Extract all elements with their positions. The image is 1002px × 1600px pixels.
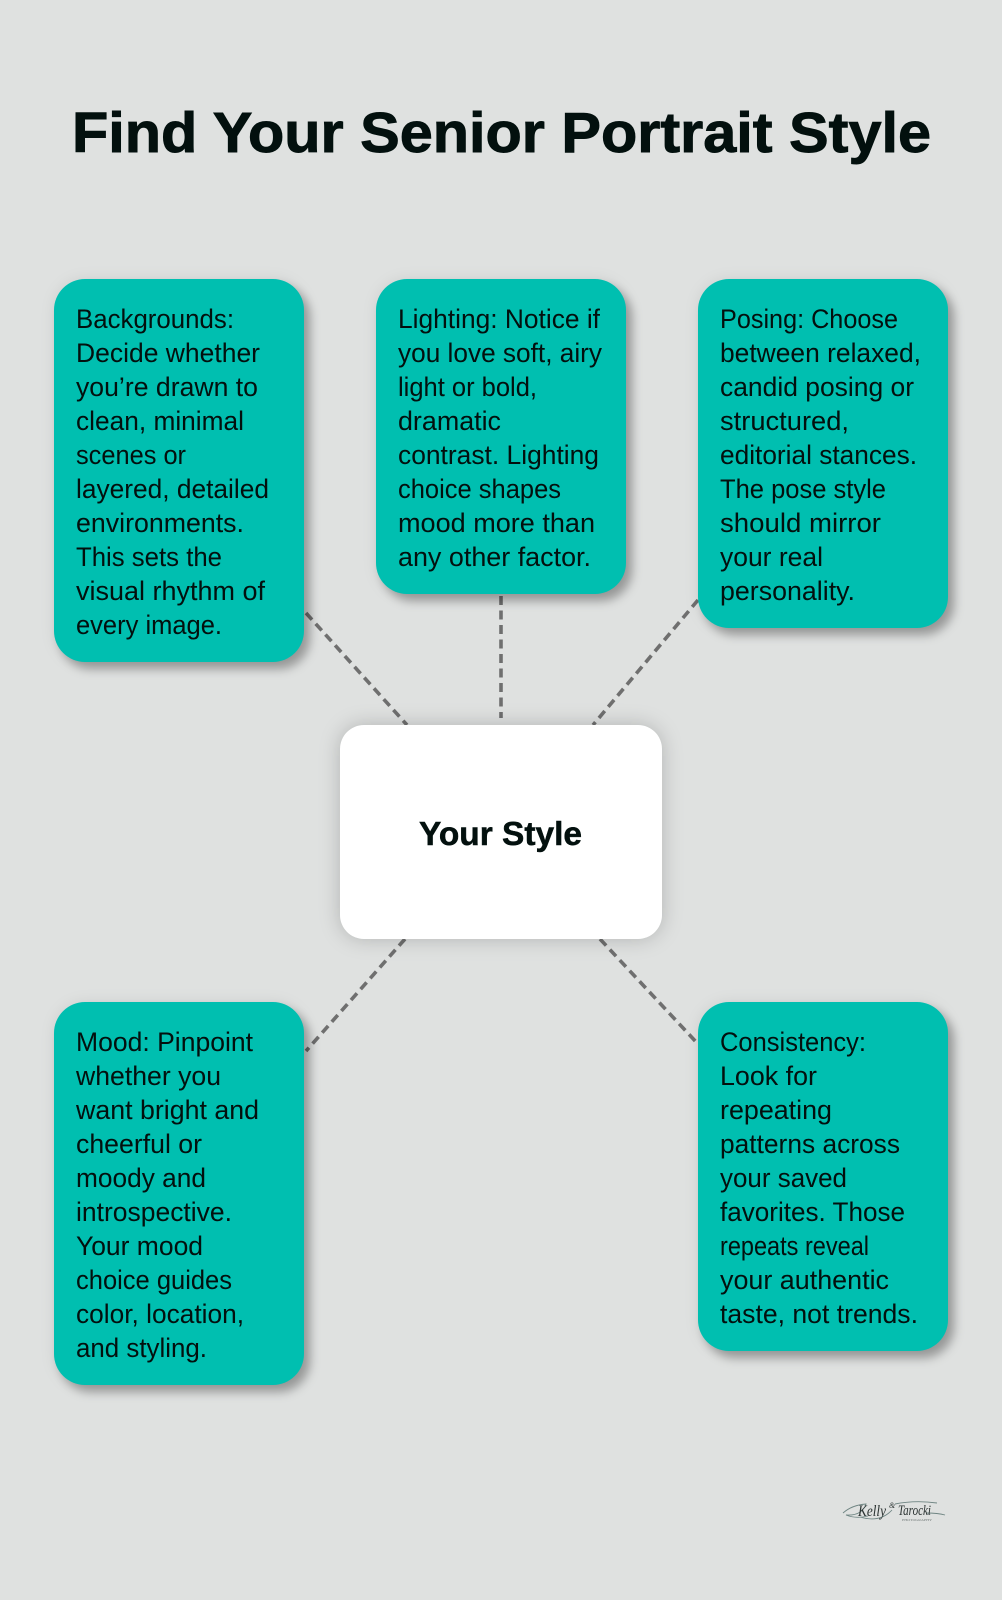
panel: consistency <box>698 1002 948 1351</box>
panel: mood: Your mood <box>76 1231 203 1261</box>
connector: consistency to centre <box>600 939 698 1044</box>
panel: backgrounds: every image. <box>76 610 222 640</box>
panel: mood: want bright and <box>75 1095 259 1125</box>
panel: backgrounds: visual rhythm of <box>76 576 266 606</box>
panel: posing: should mirror <box>720 508 881 538</box>
panel: backgrounds: clean, minimal <box>76 406 244 436</box>
panel: lighting: dramatic <box>398 406 501 436</box>
panel: consistency: patterns across <box>720 1129 900 1159</box>
panel: posing: candid posing or <box>720 372 914 402</box>
centre box: your style <box>340 725 662 939</box>
panel: backgrounds: you’re drawn to <box>76 372 258 402</box>
panel: backgrounds: environments. <box>76 508 244 538</box>
panel: posing: personality. <box>720 576 855 606</box>
panel: backgrounds: Decide whether <box>76 338 260 368</box>
panel: posing: Posing: Choose <box>720 304 898 334</box>
panel: backgrounds: This sets the <box>76 542 222 572</box>
panel: mood: whether you <box>75 1061 221 1091</box>
panel: consistency: Consistency: <box>720 1027 866 1057</box>
panel: backgrounds: Backgrounds: <box>76 304 234 334</box>
panel: consistency: favorites. Those <box>720 1197 905 1227</box>
panel: mood: and styling. <box>76 1333 207 1363</box>
panel: lighting: contrast. Lighting <box>398 440 599 470</box>
panel: consistency: repeating <box>720 1095 832 1125</box>
logo: Kelly & Tarocki Photography: & <box>889 1501 896 1510</box>
panel: consistency: repeats reveal <box>720 1231 869 1261</box>
connector: backgrounds to centre <box>306 613 407 725</box>
panel: mood: introspective. <box>76 1197 232 1227</box>
panel: mood: cheerful or <box>76 1129 202 1159</box>
connector: lighting to centre <box>499 596 503 718</box>
panel: mood: color, location, <box>76 1299 244 1329</box>
panel: posing: structured, <box>720 406 849 436</box>
panel: backgrounds <box>54 279 304 662</box>
connector: mood to centre <box>306 939 405 1051</box>
panel: lighting: choice shapes <box>398 474 561 504</box>
panel: backgrounds: layered, detailed <box>76 474 269 504</box>
logo: Kelly & Tarocki Photography: Kelly <box>857 1503 887 1520</box>
panel: lighting <box>376 279 626 594</box>
panel: consistency: taste, not trends. <box>720 1299 918 1329</box>
panel: posing: between relaxed, <box>720 338 921 368</box>
title: Find Your Senior Portrait Style <box>72 101 931 165</box>
logo: Kelly & Tarocki Photography: Tarocki <box>898 1503 931 1519</box>
panel: mood: Mood: Pinpoint <box>76 1027 254 1057</box>
panel: lighting: any other factor. <box>398 542 591 572</box>
panel: lighting: mood more than <box>398 508 595 538</box>
panel: posing: your real <box>720 542 823 572</box>
panel: mood <box>54 1002 304 1385</box>
panel: posing: The pose style <box>720 474 886 504</box>
connector: posing to centre <box>593 600 698 725</box>
panel: consistency: Look for <box>720 1061 817 1091</box>
panel: lighting: you love soft, airy <box>398 338 603 368</box>
panel: lighting: light or bold, <box>398 372 537 402</box>
panel: posing: editorial stances. <box>720 440 917 470</box>
panel: posing <box>698 279 948 628</box>
logo: Kelly & Tarocki Photography <box>843 1501 945 1522</box>
panel: consistency: your saved <box>720 1163 847 1193</box>
panel: mood: moody and <box>76 1163 206 1193</box>
centre box: your style: Your Style <box>419 815 582 852</box>
panel: consistency: your authentic <box>720 1265 889 1295</box>
panel: backgrounds: scenes or <box>76 440 186 470</box>
logo: Kelly & Tarocki Photography: PHOTOGRAPHY <box>902 1518 933 1522</box>
panel: mood: choice guides <box>76 1265 232 1295</box>
panel: lighting: Lighting: Notice if <box>398 304 601 334</box>
